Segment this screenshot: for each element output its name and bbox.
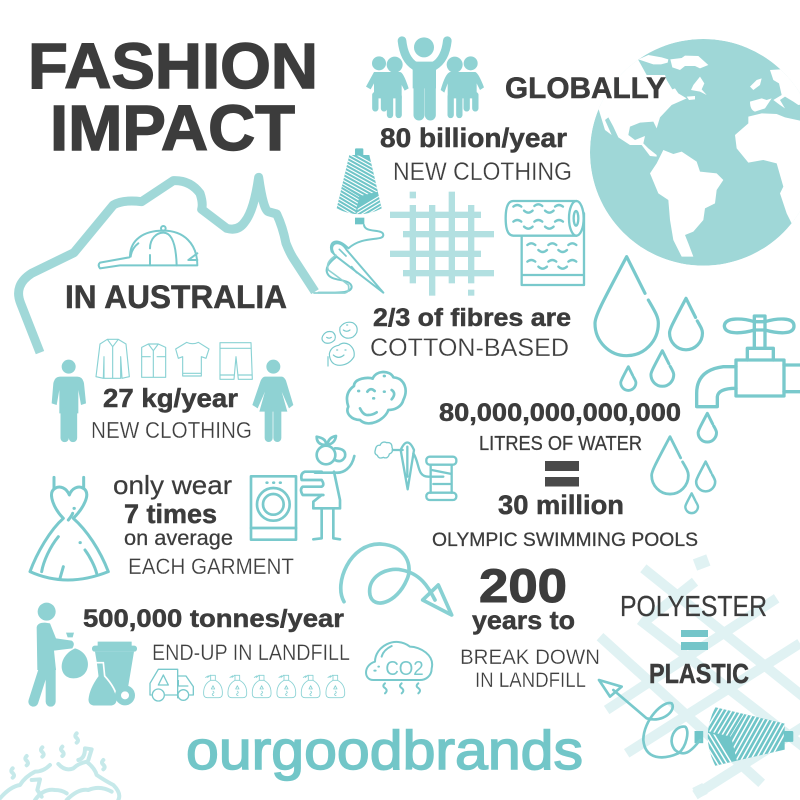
icon: woven fabric grid <box>390 192 494 296</box>
title: IMPACT <box>50 92 295 164</box>
icon: woman carrying laundry <box>301 436 354 539</box>
icon: globe <box>585 30 800 266</box>
stat: 200 years: 200 <box>479 559 567 612</box>
stat: 500000 tonnes: END-UP IN LANDFILL <box>152 640 350 665</box>
stat: only wear 7 times <box>113 470 294 579</box>
stat: cotton fibres: 2/3 of fibres are <box>373 304 571 332</box>
arrow: swirl <box>341 544 452 615</box>
icon: faded landfill mound <box>0 733 119 800</box>
stat: 80 billion <box>380 123 572 186</box>
stat: 200 years <box>460 559 600 692</box>
stat: 80 billion: 80 billion/year <box>380 123 568 153</box>
icon: thread cone and needle <box>318 140 387 293</box>
icon: dress <box>30 477 108 580</box>
stat: 27 kg per year <box>91 383 252 443</box>
pattern: faded polyester weave <box>600 560 800 795</box>
icons: rubbish bags <box>204 675 345 698</box>
stat: polyester equals plastic: PLASTIC <box>649 658 749 689</box>
icon: person with rubbish bin <box>33 603 137 706</box>
stat: 27 kg per year: 27 kg/year <box>103 383 238 413</box>
icon: crowd of people <box>366 37 484 115</box>
stat: polyester equals plastic: POLYESTER <box>620 591 767 623</box>
icon: recycling truck <box>150 669 193 701</box>
stat: 500000 tonnes: 500,000 tonnes/year <box>83 605 344 633</box>
stat: polyester equals plastic <box>620 591 767 689</box>
icon: drops top <box>595 257 702 390</box>
stat: litres of water <box>432 399 698 551</box>
stat: only wear 7 times: 7 times <box>124 499 217 529</box>
stat: cotton fibres: COTTON-BASED <box>370 334 569 362</box>
stat: litres of water: 80,000,000,000,000 <box>439 399 681 427</box>
stat: 200 years: BREAK DOWN <box>460 646 600 669</box>
icon: fabric roll <box>506 201 584 285</box>
stat: litres of water: 30 million <box>498 490 624 520</box>
stat: only wear 7 times: on average <box>124 527 233 550</box>
icons: clothing items <box>96 339 252 379</box>
icon: thread cone with arrow <box>599 680 800 772</box>
icon: woman <box>252 360 293 438</box>
logo: ourgoodbrands: ourgoodbrands <box>186 719 583 781</box>
title: FASHION <box>28 30 318 102</box>
heading: in Australia: IN AUSTRALIA <box>65 279 287 315</box>
icon: CO2 cloud <box>366 642 432 693</box>
stat: 27 kg per year: NEW CLOTHING <box>91 417 252 443</box>
stat: 500000 tonnes <box>83 605 350 665</box>
stat: litres of water: OLYMPIC SWIMMING POOLS <box>432 530 698 551</box>
icon: needle and spool <box>375 442 456 500</box>
stat: 80 billion: NEW CLOTHING <box>393 158 572 186</box>
icon: CO2 cloud: CO2 <box>385 658 424 680</box>
stat: 200 years: IN LANDFILL <box>475 669 586 692</box>
outline: Australia map <box>19 177 349 353</box>
stat: litres of water: LITRES OF WATER <box>479 433 642 455</box>
heading: globally: GLOBALLY <box>505 72 666 105</box>
title <box>28 30 318 164</box>
stat: cotton fibres <box>370 304 571 362</box>
icon: man <box>52 360 86 438</box>
icon: large cotton boll <box>347 372 406 423</box>
icon: drops lower <box>652 413 717 513</box>
stat: 200 years: years to <box>472 605 575 635</box>
stat: only wear 7 times: only wear <box>113 470 232 500</box>
icon: washing machine <box>251 476 296 540</box>
icon: small cotton bolls <box>322 322 357 366</box>
stat: only wear 7 times: EACH GARMENT <box>128 554 294 579</box>
icon: baseball cap <box>99 226 197 268</box>
icon: water tap <box>697 316 800 407</box>
